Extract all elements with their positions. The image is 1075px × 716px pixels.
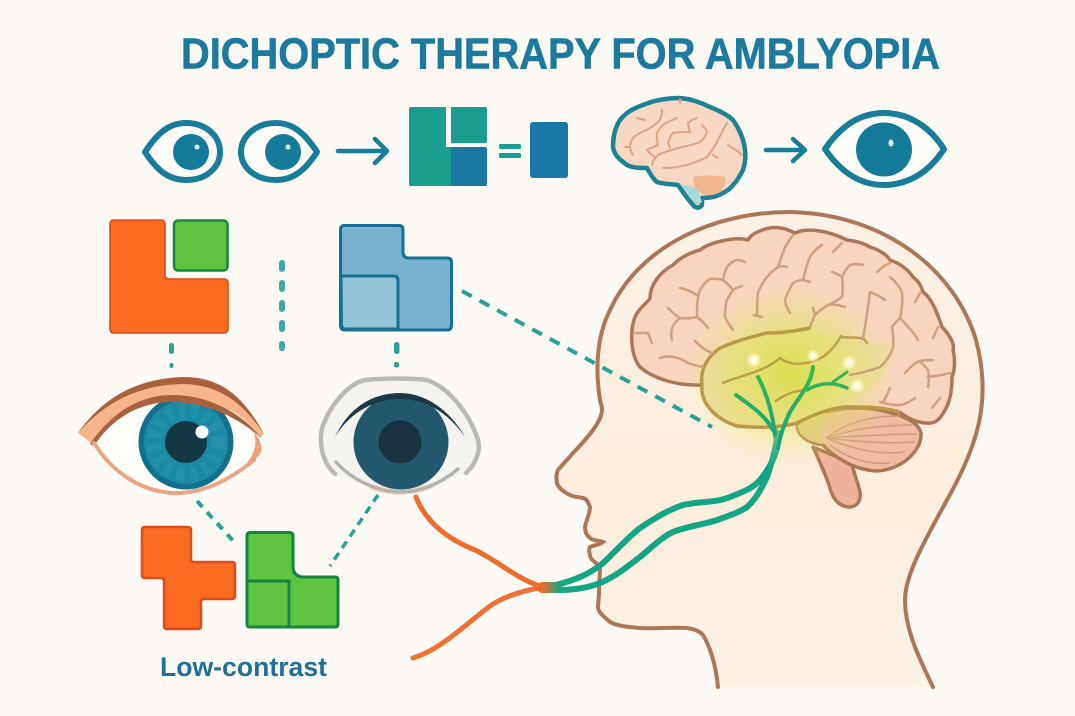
orange nerve: upper [416, 497, 540, 586]
brain [632, 228, 955, 467]
left eye stimulus: orange L and green square [110, 220, 228, 333]
arrow: eyes to blocks [338, 139, 387, 163]
cerebrum fill [632, 228, 955, 427]
activation sparks [746, 349, 865, 394]
right eye stimulus: faded blue shape [340, 226, 452, 330]
connector: left eye to green shape [197, 501, 236, 544]
orange nerve: lower [413, 587, 545, 658]
vertical dotted divider [279, 260, 285, 351]
icon: equals sign [499, 144, 521, 158]
green nerve: lower strand [556, 433, 778, 590]
arrow: brain to eye [766, 139, 805, 161]
icon: small brain [613, 98, 745, 208]
head outline [556, 212, 983, 687]
lower lid [336, 462, 458, 492]
temporal lobe outline [702, 328, 900, 427]
icon: right eye [241, 123, 317, 180]
optic nerves [413, 420, 778, 658]
connector: right eye to green shape [330, 495, 378, 566]
connector: blue shape to brain [462, 291, 712, 427]
upper eyelid band [78, 377, 264, 444]
eyelid outlines [78, 377, 264, 446]
cerebrum outline [632, 228, 955, 423]
label: low-contrast: Low-contrast [160, 652, 327, 682]
sulci [635, 235, 950, 408]
icon: left eye [145, 123, 220, 180]
upper lash [335, 393, 465, 437]
activation glow [685, 283, 895, 467]
connector: blue shape to right eye [394, 342, 400, 368]
orange puzzle piece [142, 527, 235, 629]
lower eyelid [94, 443, 254, 493]
tear duct [247, 432, 262, 463]
green puzzle piece [247, 532, 338, 627]
temporal lobe fill [702, 328, 895, 427]
icon: resulting single eye [825, 113, 944, 185]
top row: process icons [145, 98, 944, 208]
nerve branches [736, 367, 847, 448]
inner temporal sulci [723, 336, 867, 401]
amblyopic eye [321, 378, 479, 497]
green nerve: upper strand [556, 420, 777, 585]
head silhouette [556, 212, 983, 687]
healthy eye [78, 377, 264, 493]
nerve junction [538, 582, 560, 593]
icon: blue result block [530, 122, 568, 178]
cerebellum and brain stem [797, 408, 921, 507]
connector: left shape to left eye [169, 343, 174, 368]
title: DICHOPTIC THERAPY FOR AMBLYOPIA [181, 30, 940, 78]
infographic canvas [78, 38, 985, 690]
icon: fused blocks [409, 107, 487, 186]
